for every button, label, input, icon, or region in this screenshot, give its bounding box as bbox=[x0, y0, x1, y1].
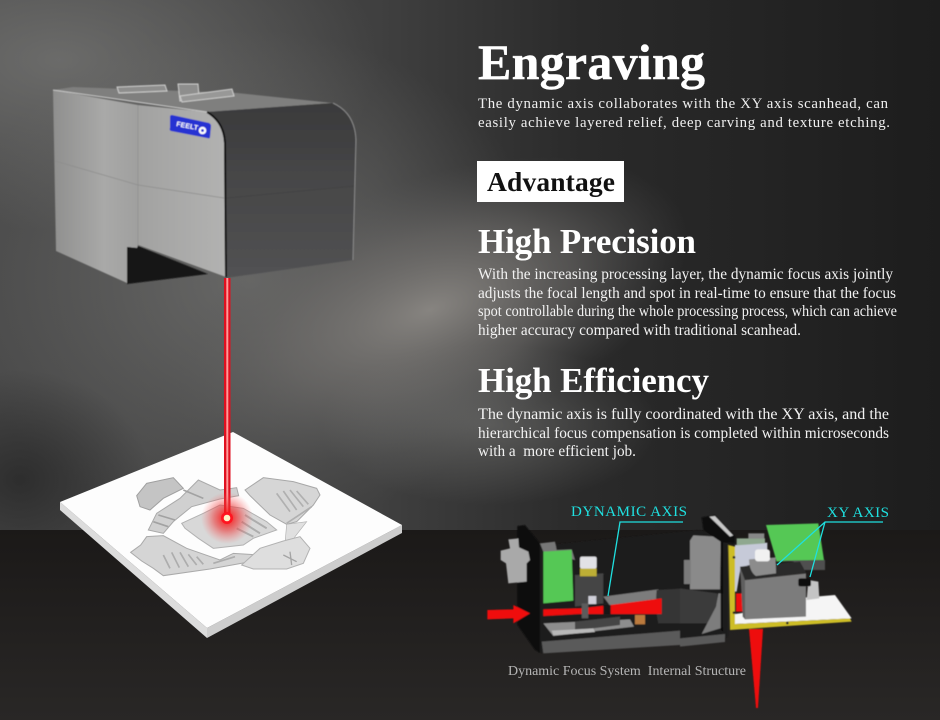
white deck bbox=[735, 595, 852, 624]
right section of optics bbox=[680, 515, 852, 647]
plate top bbox=[60, 432, 402, 628]
motor cylinder bbox=[680, 588, 717, 623]
enclosure floor right bbox=[680, 634, 725, 647]
roller bbox=[807, 580, 819, 600]
high efficiency text: The dynamic axis is fully coordinated with the XY axis, and the bbox=[478, 406, 889, 423]
FEELTEK logo badge bbox=[170, 115, 211, 138]
intro text bbox=[478, 96, 890, 131]
machine front side panel bbox=[138, 105, 226, 277]
gray mount bracket bbox=[501, 538, 530, 583]
lens block bbox=[575, 573, 603, 607]
high efficiency text: hierarchical focus compensation is completed within microseconds bbox=[478, 425, 889, 442]
right fish bbox=[245, 478, 320, 524]
gray block bbox=[690, 535, 721, 589]
dynamic axis label with leader bbox=[571, 504, 687, 596]
high precision text: spot controllable during the whole processing process, which can achieve bbox=[478, 303, 897, 320]
high precision text: adjusts the focal length and spot in real-time to ensure that the focus bbox=[478, 285, 896, 302]
high efficiency text bbox=[478, 406, 889, 460]
top cover by board bbox=[540, 542, 575, 560]
machine recessed opening bbox=[127, 246, 208, 284]
dragon cluster bbox=[137, 478, 183, 510]
xy axis label with leaders bbox=[777, 505, 889, 577]
green xy board bbox=[766, 523, 824, 562]
laser beam bbox=[201, 278, 253, 544]
scanhead block bbox=[740, 567, 745, 619]
arc band bbox=[148, 480, 239, 533]
output beam bbox=[749, 629, 763, 708]
bottom left fish bbox=[131, 536, 272, 576]
title: Engraving bbox=[478, 34, 705, 90]
dynamic focus system diagram bbox=[487, 515, 852, 708]
yellow plate bbox=[728, 545, 852, 630]
diagram caption: Dynamic Focus System Internal Structure bbox=[508, 664, 746, 679]
right fish tail bbox=[285, 522, 307, 547]
plate left thickness bbox=[60, 502, 207, 638]
machine dark rounded face bbox=[207, 103, 356, 278]
panel behind bbox=[735, 543, 767, 592]
FEELTEK logo badge: FEELT bbox=[176, 121, 199, 132]
high precision text: higher accuracy compared with traditional scanhead. bbox=[478, 322, 801, 339]
centre blob bbox=[182, 505, 277, 548]
machine top face bbox=[53, 87, 333, 112]
dragon and fish relief bbox=[131, 478, 320, 576]
xy axis label with leaders: XY AXIS bbox=[827, 505, 889, 521]
laser engraving machine head bbox=[53, 84, 356, 284]
red input arrow bbox=[487, 605, 530, 623]
high efficiency text: with a more efficient job. bbox=[478, 443, 636, 460]
high precision text: With the increasing processing layer, the dynamic focus axis jointly bbox=[478, 266, 893, 283]
plate right thickness bbox=[207, 525, 402, 638]
high precision heading: High Precision bbox=[478, 222, 696, 261]
machine left side panels bbox=[53, 90, 138, 283]
black back plate bbox=[517, 525, 540, 653]
dark cylinder bbox=[656, 589, 680, 623]
black right plate bbox=[702, 515, 735, 632]
bottom right lobe bbox=[242, 537, 310, 569]
intro text: easily achieve layered relief, deep carving and texture etching. bbox=[478, 115, 890, 131]
intro text: The dynamic axis collaborates with the XY axis scanhead, can bbox=[478, 96, 889, 112]
work plate with engraved relief bbox=[60, 432, 402, 638]
high efficiency heading: High Efficiency bbox=[478, 361, 710, 400]
dynamic axis label with leader: DYNAMIC AXIS bbox=[571, 504, 687, 520]
enclosure interior bbox=[538, 530, 728, 653]
machine top clear handles bbox=[117, 84, 234, 102]
gray rail housing bbox=[603, 589, 662, 606]
advantage label: Advantage bbox=[487, 166, 615, 197]
enclosure floor bbox=[542, 631, 680, 653]
advantage label bbox=[477, 161, 624, 202]
laser impact spot bbox=[201, 492, 253, 544]
high precision text bbox=[478, 266, 897, 339]
red beam bbox=[543, 598, 662, 616]
green board bbox=[543, 550, 573, 603]
left section of optics bbox=[487, 525, 680, 653]
carriage base bbox=[543, 619, 634, 636]
